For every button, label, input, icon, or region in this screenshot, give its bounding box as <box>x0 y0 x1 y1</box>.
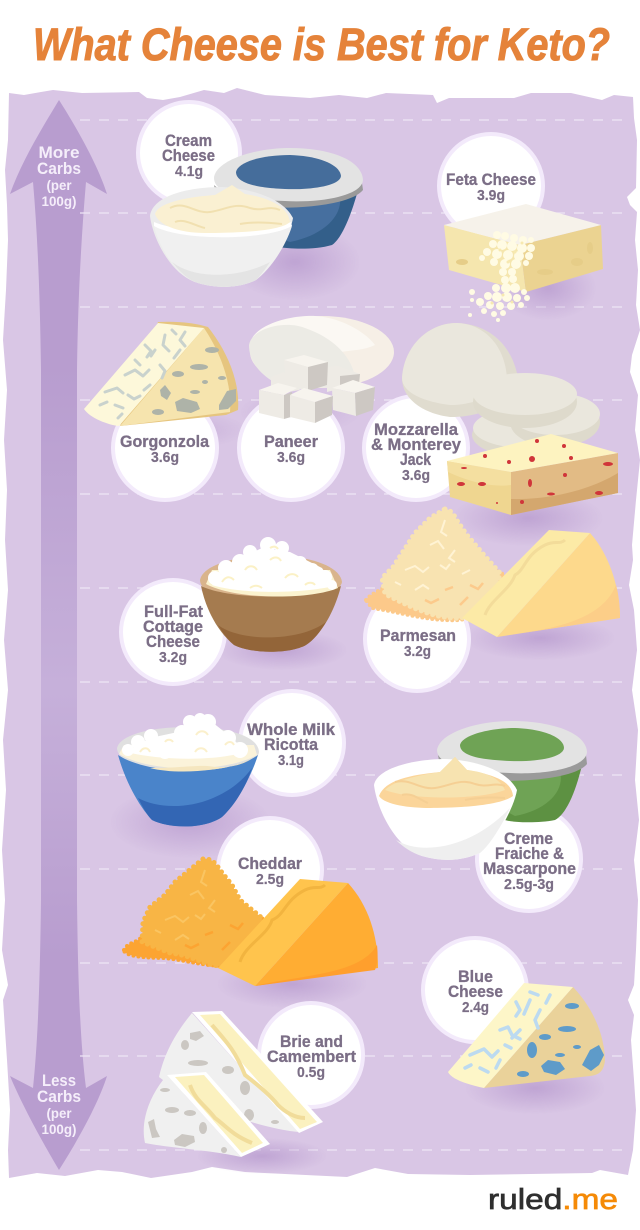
icon: cream cheese tub and bowl <box>150 148 363 287</box>
label circle: Paneer <box>239 396 343 500</box>
arrow: more carbs: Carbs <box>37 160 81 178</box>
label circle: Whole Milk Ricotta <box>240 691 344 795</box>
label circle: Parmesan <box>365 587 469 691</box>
icon: blue cheese wedge <box>448 983 605 1088</box>
label circle: Blue Cheese: Blue <box>458 968 493 986</box>
label circle: Creme Fraiche & Mascarpone <box>477 807 581 911</box>
label circle: Creme Fraiche & Mascarpone: Creme <box>504 830 553 848</box>
label circle: Creme Fraiche & Mascarpone: Fraiche & <box>495 845 564 863</box>
arrow: more carbs: More <box>38 144 80 162</box>
label circle: Parmesan: Parmesan <box>380 627 456 645</box>
label circle: Mozzarella & Monterey Jack: Mozzarella <box>374 421 459 439</box>
label circle: Cream Cheese: Cheese <box>162 147 215 165</box>
arrow: less carbs: Less <box>42 1072 76 1090</box>
label circle: Parmesan: 3.2g <box>404 644 431 660</box>
arrow: more carbs: (per <box>46 178 72 193</box>
arrow: more carbs: 100g) <box>42 194 76 209</box>
icon: feta cheese block with crumbles <box>444 204 603 322</box>
label circle: Brie and Camembert: Camembert <box>267 1048 356 1066</box>
label circle: Creme Fraiche & Mascarpone: 2.5g-3g <box>504 877 554 893</box>
icon: brie wedge back <box>159 1011 323 1133</box>
label circle: Full-Fat Cottage Cheese: Full-Fat <box>144 603 203 621</box>
icon: cheddar pile <box>124 859 270 966</box>
icon: paneer with cubes <box>249 316 394 423</box>
label circle: Paneer: Paneer <box>264 433 319 451</box>
label circle: Brie and Camembert: Brie and <box>280 1033 343 1051</box>
label circle: Mozzarella & Monterey Jack <box>364 396 468 500</box>
label circle: Cheddar: 2.5g <box>256 872 284 888</box>
icon: cheddar wedge <box>218 879 378 986</box>
label circle: Full-Fat Cottage Cheese: 3.2g <box>159 650 187 666</box>
label circle: Cream Cheese: 4.1g <box>175 164 203 180</box>
icon: parmesan pile <box>366 509 510 620</box>
logo: ruled .me <box>488 1184 618 1216</box>
label circle: Mozzarella & Monterey Jack: 3.6g <box>402 468 430 484</box>
label circle: Blue Cheese: Cheese <box>448 983 503 1001</box>
label circle: Whole Milk Ricotta: Ricotta <box>264 736 319 754</box>
label circle: Gorgonzola: 3.6g <box>151 450 179 466</box>
label circle: Whole Milk Ricotta: 3.1g <box>278 753 304 769</box>
arrow: more carbs <box>10 100 107 640</box>
label circle: Cheddar <box>218 818 322 922</box>
icon: gorgonzola wedge <box>84 322 238 426</box>
label circle: Feta Cheese: Feta Cheese <box>446 171 536 189</box>
label circle: Feta Cheese: 3.9g <box>477 188 505 204</box>
label circle: Feta Cheese <box>439 134 543 238</box>
icon: mozzarella ball and discs <box>402 323 600 457</box>
arrow: less carbs: 100g) <box>42 1122 76 1137</box>
label circle: Whole Milk Ricotta: Whole Milk <box>247 721 336 739</box>
arrow: less carbs: (per <box>46 1106 72 1121</box>
icon: monterey jack block <box>447 434 618 515</box>
label circle: Brie and Camembert: 0.5g <box>297 1065 325 1081</box>
label circle: Mozzarella & Monterey Jack: Jack <box>400 451 432 469</box>
arrow: less carbs: Carbs <box>37 1088 81 1106</box>
label circle: Cheddar: Cheddar <box>238 855 303 873</box>
icon: mascarpone tub and bowl <box>374 721 587 860</box>
label circle: Gorgonzola <box>113 396 217 500</box>
label circle: Cream Cheese: Cream <box>165 132 212 150</box>
label circle: Cream Cheese <box>138 102 240 204</box>
arrow: less carbs <box>10 640 107 1170</box>
label circle: Full-Fat Cottage Cheese: Cheese <box>146 633 200 651</box>
label circle: Blue Cheese <box>423 938 527 1042</box>
label circle: Paneer: 3.6g <box>277 450 305 466</box>
icon: cottage cheese bowl <box>200 537 342 652</box>
label circle: Full-Fat Cottage Cheese <box>121 580 225 684</box>
label circle: Gorgonzola: Gorgonzola <box>120 433 210 451</box>
label circle: Brie and Camembert <box>259 1003 363 1107</box>
label circle: Full-Fat Cottage Cheese: Cottage <box>143 618 203 636</box>
label circle: Blue Cheese: 2.4g <box>462 1000 489 1016</box>
icon: camembert wedge front <box>144 1072 270 1157</box>
icon: ricotta bowl <box>117 713 259 826</box>
label circle: Creme Fraiche & Mascarpone: Mascarpone <box>483 860 576 878</box>
label circle: Mozzarella & Monterey Jack: & Monterey <box>371 436 462 454</box>
icon: parmesan wedge <box>462 530 620 637</box>
